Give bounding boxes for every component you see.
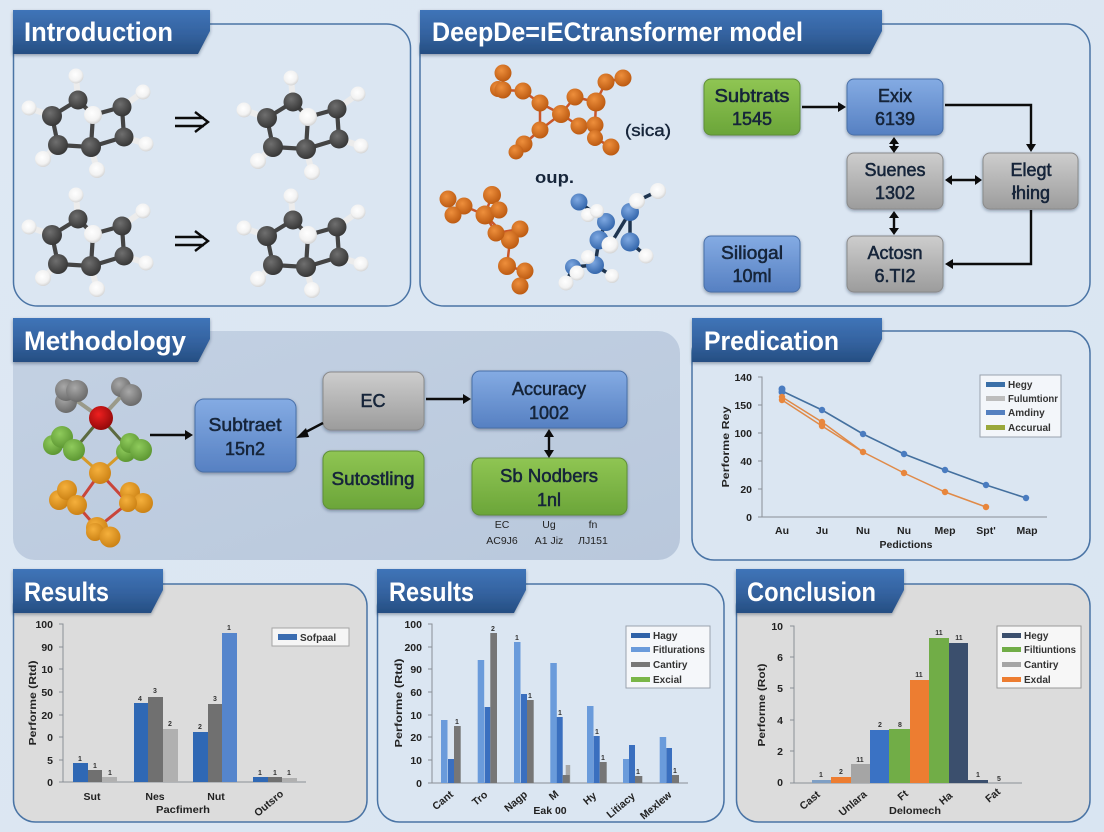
box: ec [323, 372, 424, 430]
x axis labels: Ha [937, 790, 955, 808]
x axis labels: Nes [145, 791, 165, 803]
legend: Fulumtionr [1008, 394, 1058, 405]
x axis labels: Nu [897, 525, 911, 537]
y axis title: Performe Rey [720, 406, 732, 488]
heading: conclusion [736, 569, 904, 613]
legend: Exdal [1024, 675, 1051, 686]
bar value labels: 2 [491, 626, 495, 633]
bar chart: results middle: 90 [410, 664, 422, 676]
y axis title: Performe (Rtd) [393, 658, 405, 748]
x axis labels: Cast [797, 788, 823, 813]
bar value labels: 11 [955, 635, 963, 642]
box: actosn [847, 236, 943, 292]
box: sutostling [323, 451, 424, 509]
heading: transformer model [420, 10, 882, 54]
box: subtraet: Subtraet [208, 415, 282, 435]
bar value labels: 3 [213, 696, 217, 703]
x axis labels [775, 525, 1038, 551]
bar value labels [78, 625, 291, 777]
bar chart: conclusion: 10 [771, 621, 783, 633]
line chart: prediction: 20 [740, 484, 752, 496]
bar chart: results middle: 20 [410, 732, 422, 744]
bar chart: conclusion: 5 [777, 683, 783, 695]
heading: results middle: Results [389, 577, 474, 607]
legend [272, 628, 349, 646]
x axis labels: Nut [207, 791, 225, 803]
arrows: model flow [802, 102, 1036, 269]
arrows: methodology flow [150, 394, 554, 458]
molecule: top right [236, 70, 368, 180]
box: siliogal: Siliogal [721, 243, 783, 263]
bar value labels: 1 [455, 719, 459, 726]
bar chart: conclusion: 0 [777, 777, 783, 789]
box: sb nodbers [472, 458, 627, 515]
bar value labels: 1 [601, 755, 605, 762]
box: accuracy [472, 371, 627, 428]
box: sutostling: Sutostling [332, 469, 414, 489]
bar value labels: 5 [997, 776, 1001, 783]
bar chart: results left: 90 [41, 642, 53, 654]
box: elegt [983, 153, 1078, 209]
bar value labels: 4 [138, 696, 142, 703]
x axis labels: Fat [983, 786, 1003, 805]
bar chart: results left: 50 [41, 687, 53, 699]
panel: results middle [377, 569, 724, 822]
bar value labels: 1 [976, 772, 980, 779]
legend: Excial [653, 675, 682, 686]
table: small metrics: ЛJ151 [578, 535, 608, 547]
box: suenes [847, 153, 943, 209]
box: actosn: 6.TI2 [874, 266, 916, 286]
molecule: bottom right [236, 188, 368, 298]
box: exix [847, 79, 943, 135]
box: subtraet: 15n2 [225, 439, 265, 459]
bar value labels: 1 [515, 635, 519, 642]
bar chart: results middle: 0 [416, 778, 422, 790]
box: elegt: łhing [1012, 183, 1050, 203]
bar chart: results left: 5 [47, 755, 53, 767]
bar value labels: 8 [898, 722, 902, 729]
line chart: prediction: 100 [734, 428, 752, 440]
box: sb nodbers: Sb Nodbers [500, 466, 598, 486]
heading: results left: Results [24, 577, 109, 607]
heading: transformer model: DeepDe=ıECtransformer model [432, 17, 803, 47]
bar chart: results middle: 60 [410, 687, 422, 699]
bar chart: conclusion: 4 [777, 715, 783, 727]
box: exix: Exix [878, 86, 912, 106]
bar value labels: 1 [636, 769, 640, 776]
legend: Cantiry [653, 660, 688, 671]
molecule: upper orange [490, 64, 632, 160]
bar chart: results left: 100 [35, 619, 53, 631]
heading: results left [13, 569, 163, 613]
bar value labels: 1 [558, 710, 562, 717]
legend: Accurual [1008, 423, 1051, 434]
panel: transformer model [420, 10, 1090, 306]
x axis labels: Delomech [889, 805, 941, 817]
bar value labels: 2 [839, 769, 843, 776]
bar value labels: 3 [153, 688, 157, 695]
y axis title: Performe (Rtd) [27, 660, 39, 746]
legend: Sofpaal [300, 633, 336, 644]
bar value labels: 1 [673, 768, 677, 775]
bar chart: results left: 20 [41, 710, 53, 722]
bar chart: results left: 10 [41, 664, 53, 676]
box: subtrats [704, 79, 800, 135]
bar value labels: 1 [595, 729, 599, 736]
bar value labels [455, 626, 677, 776]
x axis labels: Au [775, 525, 789, 537]
x axis labels [430, 788, 675, 822]
series: blue line [778, 386, 1029, 501]
legend: Hegy [1008, 380, 1033, 391]
bar value labels: 1 [227, 625, 231, 632]
table: small metrics: A1 Jiz [535, 535, 563, 547]
box: siliogal: 10ml [732, 266, 772, 286]
series: orange line [779, 394, 989, 510]
table: small metrics: fn [589, 519, 598, 531]
molecule: top left [22, 68, 154, 178]
x axis labels: Outsro [252, 788, 286, 819]
bar value labels: 2 [168, 721, 172, 728]
y axis title: Performe (Rot) [756, 664, 768, 746]
panel: methodology [13, 318, 680, 560]
legend [997, 626, 1081, 688]
legend: Hegy [1024, 631, 1049, 642]
heading: prediction [692, 318, 882, 362]
legend: Cantiry [1024, 660, 1059, 671]
bar value labels [819, 630, 1001, 783]
bar value labels: 1 [287, 770, 291, 777]
x axis labels: Nagp [502, 789, 530, 815]
bar value labels: 11 [856, 757, 864, 764]
bar chart: results middle: 100 [404, 619, 422, 631]
x axis labels: Pacfimerh [156, 804, 210, 816]
line chart: prediction: 150 [734, 400, 752, 412]
x axis labels: Mexlew [638, 789, 675, 822]
bar chart: results middle [393, 619, 710, 822]
bar value labels: 2 [878, 722, 882, 729]
bar chart: conclusion: 6 [777, 652, 783, 664]
box: elegt: Elegt [1010, 160, 1052, 180]
heading: results middle [377, 569, 526, 613]
legend: Filtiuntions [1024, 645, 1076, 656]
arrow: bottom reaction [175, 231, 208, 251]
box: accuracy: 1002 [529, 403, 569, 423]
heading: conclusion: Conclusion [747, 577, 876, 607]
panel: prediction [692, 318, 1090, 560]
line chart: prediction [720, 372, 1061, 551]
x axis labels: M [547, 788, 561, 803]
bar chart: results middle: 200 [404, 642, 422, 654]
bar value labels: 1 [108, 770, 112, 777]
box: exix: 6139 [875, 109, 915, 129]
box: suenes: 1302 [875, 183, 915, 203]
x axis labels: Sut [84, 791, 101, 803]
box: subtraet [195, 399, 296, 472]
bars [73, 633, 297, 782]
panel: results left [13, 569, 367, 822]
x axis labels [797, 786, 1003, 819]
bar chart: results left [27, 619, 349, 819]
bar value labels: 1 [528, 693, 532, 700]
x axis labels: Spt' [976, 525, 996, 537]
x axis labels: Ju [816, 525, 828, 537]
heading: introduction [13, 10, 210, 54]
x axis labels: Litiacy [604, 790, 638, 821]
x axis labels: Eak 00 [533, 805, 567, 817]
label: oup: oup. [535, 168, 574, 187]
line chart: prediction: 40 [740, 456, 752, 468]
box: ec: EC [360, 391, 386, 411]
heading: introduction: Introduction [24, 17, 173, 47]
bar chart: results left: 0 [47, 777, 53, 789]
legend: Amdiny [1008, 408, 1045, 419]
box: suenes: Suenes [864, 160, 926, 180]
x axis labels: Tro [470, 789, 490, 809]
heading: prediction: Predication [704, 326, 839, 356]
bar chart: conclusion: 2 [777, 746, 783, 758]
x axis labels: Nu [856, 525, 870, 537]
bar chart: results middle: 10 [410, 755, 422, 767]
box: accuracy: Accuracy [512, 379, 586, 399]
x axis labels: Unlara [837, 789, 870, 819]
x axis labels: Hy [581, 790, 599, 808]
bar value labels: 1 [273, 770, 277, 777]
box: actosn: Actosn [867, 243, 923, 263]
legend [626, 626, 710, 688]
x axis labels [84, 788, 286, 819]
table: small metrics [486, 519, 608, 547]
line chart: prediction: 140 [734, 372, 752, 384]
molecule: lower orange [440, 186, 534, 294]
legend: Hagy [653, 631, 678, 642]
bar chart: results middle: 10 [410, 710, 422, 722]
bar chart: conclusion [756, 621, 1081, 819]
heading: methodology [13, 318, 210, 362]
bars [441, 633, 679, 783]
x axis labels: Ft [895, 788, 911, 803]
box: subtrats: 1545 [732, 109, 772, 129]
legend: Fitlurations [653, 645, 705, 656]
bar value labels: 11 [915, 672, 923, 679]
x axis labels: Cant [430, 788, 456, 813]
panel: introduction [13, 10, 410, 306]
bar value labels: 11 [935, 630, 943, 637]
bars [812, 638, 988, 783]
bar value labels: 1 [93, 763, 97, 770]
molecule: bottom left [22, 188, 154, 297]
molecule: methodology [43, 377, 153, 548]
panel: conclusion [736, 569, 1090, 822]
table: small metrics: Ug [542, 519, 556, 531]
box: sb nodbers: 1nl [537, 490, 561, 510]
box: subtrats: Subtrats [714, 86, 790, 106]
x axis labels: Pedictions [880, 539, 933, 551]
bar value labels: 1 [819, 772, 823, 779]
box: siliogal [704, 236, 800, 292]
table: small metrics: EC [495, 519, 510, 531]
molecule: blue and white [558, 183, 666, 290]
bar value labels: 1 [78, 756, 82, 763]
line chart: prediction: 0 [746, 512, 752, 524]
heading: methodology: Methodology [24, 326, 186, 356]
bar chart: results left: 0 [47, 732, 53, 744]
table: small metrics: AC9J6 [486, 535, 518, 547]
arrow: top reaction [175, 112, 208, 132]
bar value labels: 1 [258, 770, 262, 777]
legend [980, 375, 1061, 437]
label: sica: (sica) [625, 121, 671, 140]
bar value labels: 2 [198, 724, 202, 731]
x axis labels: Mep [934, 525, 956, 537]
x axis labels: Map [1016, 525, 1038, 537]
